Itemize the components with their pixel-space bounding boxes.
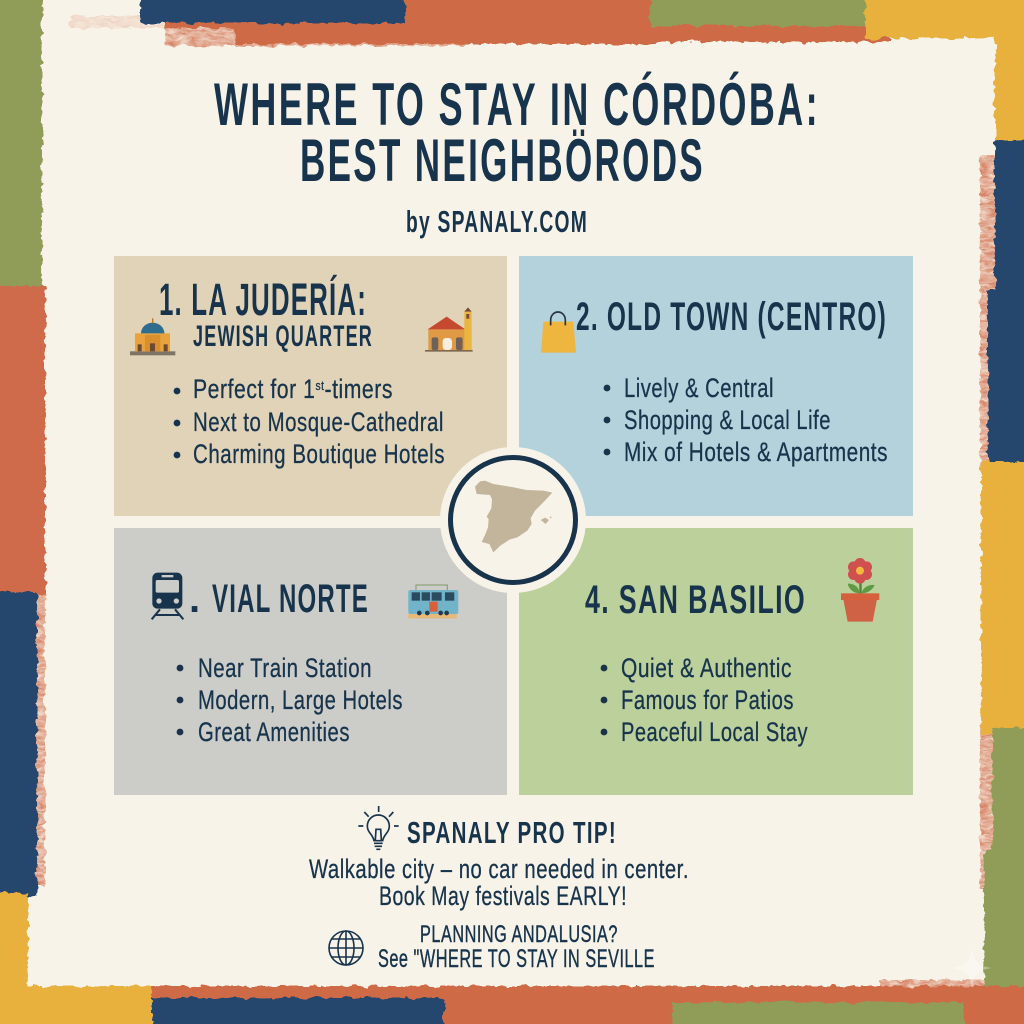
bullet list: Vial Norte: Modern, Large Hotels (198, 685, 403, 715)
bullet list: La Judería: -timers (324, 374, 393, 404)
bullet list: La Judería: Next to Mosque-Cathedral (193, 407, 444, 437)
heading: San Basilio: 4. SAN BASILIO (585, 578, 806, 622)
pro tip heading: SPANALY PRO TIP! (407, 815, 617, 850)
pro tip text (309, 854, 689, 911)
bullet list: La Judería (174, 374, 445, 469)
heading: Vial Norte (189, 577, 369, 621)
bullet list: San Basilio: Famous for Patios (621, 685, 794, 715)
title: BEST NEIGHBÖRODS (300, 127, 705, 194)
cross-promotion text: PLANNING ANDALUSIA? (420, 921, 618, 948)
bullet list: San Basilio (601, 653, 808, 747)
pro tip heading (358, 806, 617, 850)
icon: tram (408, 585, 458, 618)
panel: La Judería (114, 256, 507, 516)
icon: light bulb (358, 806, 399, 849)
bullet list: Vial Norte: Great Amenities (198, 717, 350, 747)
heading: La Judería (159, 274, 373, 353)
panel: Vial Norte (114, 528, 507, 795)
icon: church (425, 307, 473, 352)
panel: San Basilio (519, 528, 913, 795)
bullet list: San Basilio: Quiet & Authentic (621, 653, 792, 683)
icon: mosque (130, 318, 175, 355)
pro tip text: Walkable city – no car needed in center. (309, 854, 689, 884)
centre badge: Spain map (440, 447, 586, 593)
heading: La Judería: 1. LA JUDERÍA: (159, 274, 367, 325)
bullet list: Old Town: Lively & Central (624, 373, 774, 403)
bullet list: Old Town: Mix of Hotels & Apartments (624, 437, 888, 467)
bullet list: Old Town: Shopping & Local Life (624, 405, 831, 435)
title (214, 71, 820, 194)
byline: by SPANALY.COM (406, 204, 588, 239)
bullet list: La Judería: Charming Boutique Hotels (193, 439, 445, 469)
icon: map of Spain (475, 481, 552, 552)
panel: Old Town (519, 256, 913, 516)
icon: shopping bag (541, 312, 576, 353)
bullet list: Vial Norte: Near Train Station (198, 653, 372, 683)
heading: Vial Norte: VIAL NORTE (212, 577, 369, 621)
heading: Vial Norte: . (189, 577, 202, 621)
icon: train symbol (152, 573, 183, 619)
bullet list: Vial Norte (177, 653, 403, 747)
sparkle (952, 948, 992, 988)
bullet list: Old Town (604, 373, 888, 467)
bullet list: La Judería: Perfect for 1 (193, 374, 349, 404)
bullet list: San Basilio: Peaceful Local Stay (621, 717, 808, 747)
bullet list: La Judería: st (315, 378, 324, 393)
icon: globe (329, 931, 363, 965)
cross-promotion text (378, 921, 655, 973)
heading: La Judería: JEWISH QUARTER (193, 320, 373, 353)
cross-promotion text: See "WHERE TO STAY IN SEVILLE (378, 945, 655, 973)
pro tip text: Book May festivals EARLY! (379, 881, 627, 911)
icon: potted flower (841, 558, 879, 622)
